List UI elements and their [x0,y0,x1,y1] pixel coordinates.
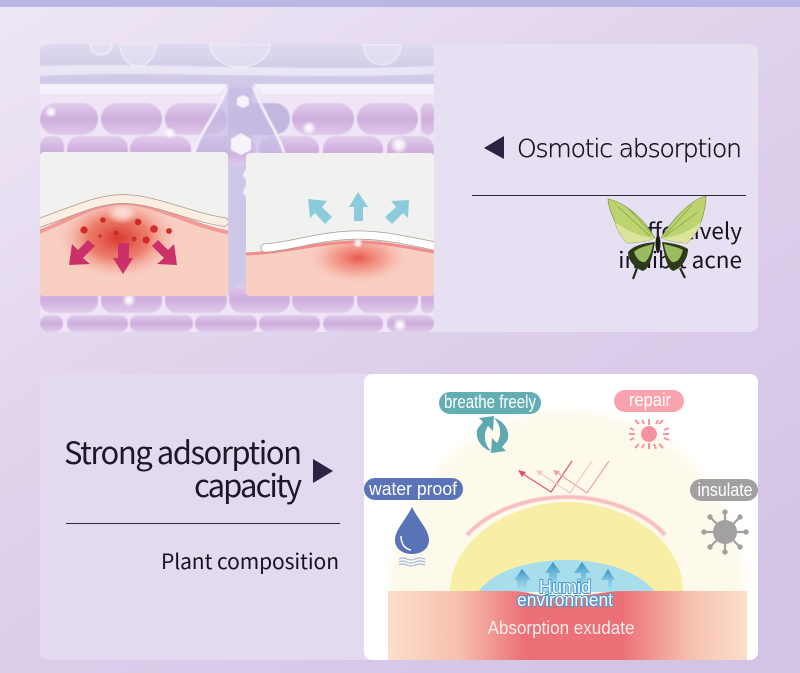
text card: strong adsorption [40,374,758,660]
skin film [30,199,224,226]
skin base [388,591,747,660]
text: effectively inhibit acne: inhibit acne [618,243,742,275]
label: humid environment [517,577,613,610]
illustration: protective dressing [364,374,758,660]
text: effectively inhibit acne: effectively [635,214,742,246]
callout: repair [614,390,684,449]
residual redness [316,240,400,280]
icon: recycle arrows [477,416,508,453]
panel: strong adsorption capacity [40,374,758,660]
callout: water proof: water proof [368,479,458,499]
pink line [246,242,440,254]
top band [0,0,800,7]
label: humid environment: environment [517,590,613,610]
skin layer [246,242,434,296]
heading: strong adsorption capacity: capacity [194,461,302,506]
arrows: outward, pink [69,240,177,274]
callout: insulate: insulate [698,480,752,500]
icon: left pointer [484,136,504,159]
icon: green butterfly [608,196,706,279]
icon: virus [702,510,748,554]
text: effectively inhibit acne [618,214,742,275]
text card: osmotic absorption [40,44,758,332]
heading: strong adsorption capacity: Strong adsorption [64,428,302,473]
crystals and glints [231,95,251,198]
reflective arc [467,497,665,535]
callout: water proof [364,478,463,566]
heading: strong adsorption capacity [64,428,302,506]
pore funnel fill [194,88,284,153]
pore funnel lines [194,88,284,153]
yellow dressing [450,502,683,592]
reflected rays [520,461,609,493]
skin layer [40,204,228,296]
heading: osmotic absorption: Osmotic absorption [517,134,742,163]
pimple dots [80,217,172,244]
water droplets [90,44,401,67]
cell rows [40,103,434,332]
halo dome [388,410,746,597]
label: absorption exudate: Absorption exudate [488,618,634,638]
arrows: outward, blue [308,192,409,224]
icon: water ripples [399,558,425,566]
callout: insulate [690,479,758,554]
up arrows [514,562,615,591]
icon: right pointer [313,459,333,483]
humid blue layer [478,560,655,592]
pore background [228,86,252,296]
label: humid environment: Humid [539,577,591,597]
ray tips [518,470,560,477]
icon: sun [629,419,669,449]
panel: osmotic absorption [30,44,758,332]
callout: breathe freely [439,392,541,453]
illustration: skin cells with two insets [40,44,434,332]
callout: repair: repair [629,390,671,410]
inset: after treatment, calmed skin [246,153,444,296]
pink line [36,203,232,233]
callout: breathe freely: breathe freely [444,392,536,412]
skin surface strips [40,84,434,94]
icon: water drop [395,507,429,554]
inset: before treatment, inflamed skin [30,152,232,296]
inflammation [64,205,172,274]
text: plant composition: Plant composition [161,546,339,576]
skin film [265,235,444,248]
